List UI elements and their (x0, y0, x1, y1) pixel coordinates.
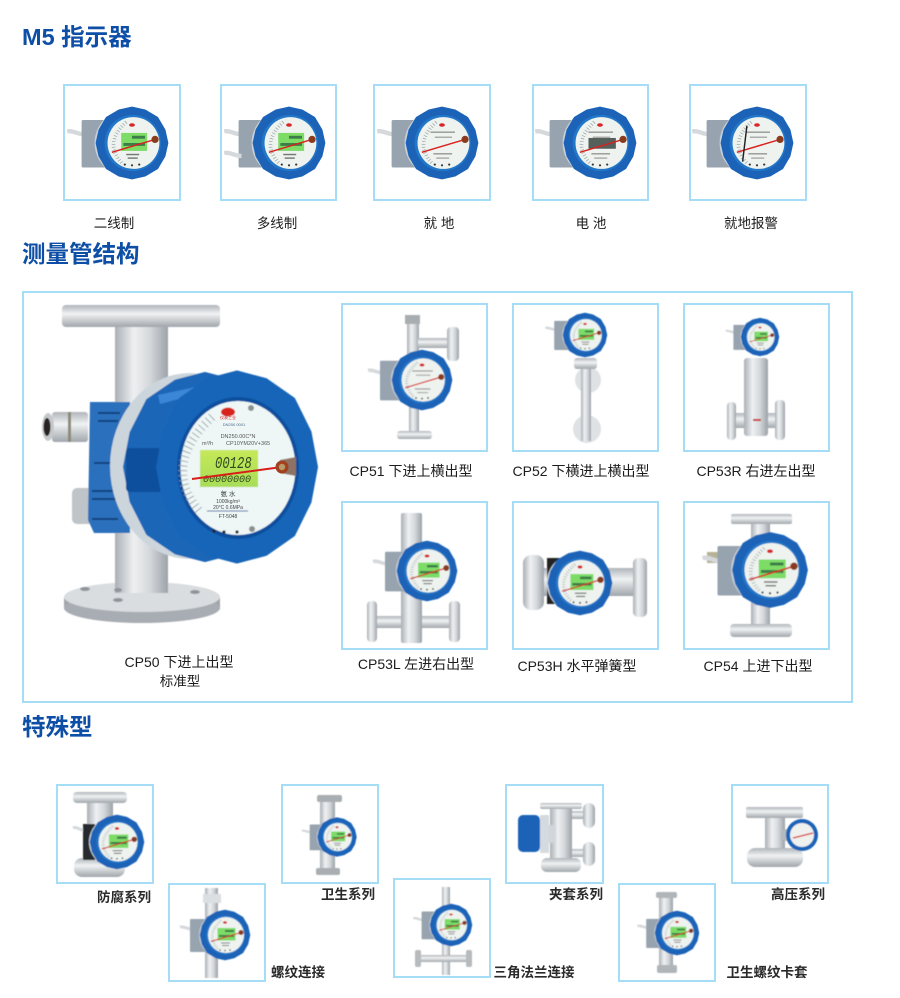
dial text: CP50: m³/h (202, 441, 213, 447)
meter: CP53L (367, 513, 460, 643)
label: high pressure: 高压系列 (771, 886, 825, 902)
tile: high-pressure series (732, 785, 828, 902)
tile: local (374, 85, 490, 231)
meter: local (377, 108, 477, 178)
label: CP50: CP50 下进上出型 (125, 654, 233, 670)
tile: sanitary series (282, 785, 378, 902)
tile: battery (533, 85, 648, 231)
meter: CP53R (726, 318, 785, 440)
tile: anticorrosion series (57, 785, 153, 905)
tile: local alarm (690, 85, 806, 231)
meter: tri-clamp (413, 887, 472, 975)
label: local alarm: 就地报警 (724, 216, 778, 231)
needle: CP50 (192, 460, 288, 479)
panel: tube structures (23, 292, 852, 702)
meter: two-wire (67, 108, 167, 178)
dial text: CP50: 00128 (215, 455, 252, 474)
meter: jacketed (518, 803, 595, 872)
meter: sanitary (302, 795, 356, 875)
label: multi-wire: 多线制 (257, 215, 297, 231)
meter: CP51 (368, 315, 459, 439)
tile: CP54 (684, 502, 829, 649)
meter: battery (535, 108, 635, 178)
meter: local alarm (692, 108, 792, 178)
heading: special types: 特殊型 (22, 714, 92, 740)
meter: sanitary threaded clamp (637, 892, 699, 973)
meter: CP50 large (42, 305, 316, 623)
dial text: CP50: DN250.00C*N (221, 434, 255, 440)
dial text: CP50: 1000kg/m³ (216, 499, 240, 505)
meter: CP53H (523, 552, 647, 617)
label: threaded: 螺纹连接 (271, 964, 325, 980)
label: tri-clamp: 三角法兰连接 (494, 964, 575, 980)
label: anticorrosion: 防腐系列 (97, 889, 151, 905)
heading: tube structure: 测量管结构 (22, 241, 140, 267)
dial text: CP50: 氨 水 (221, 489, 236, 498)
label: sanitary threaded clamp: 卫生螺纹卡套 (726, 964, 808, 980)
meter: anticorrosion (73, 792, 143, 877)
label: CP53R: CP53R 右进左出型 (696, 463, 816, 479)
meter: high pressure (746, 807, 818, 867)
dial text: CP50 (202, 414, 270, 520)
tile: CP53R (684, 304, 829, 451)
tile: tri-clamp flange (394, 879, 575, 980)
tile: threaded connection (169, 884, 325, 981)
dial text: CP50: DN250 0001 (223, 422, 246, 427)
label: standard type: 标准型 (160, 674, 200, 689)
dial text: CP50: FT-5048 (219, 514, 238, 520)
dial text: CP50: CP10YM20V+365 (226, 441, 270, 447)
dial text: CP50: 00000000 (203, 475, 251, 486)
tile: sanitary threaded clamp (619, 884, 808, 981)
label: CP53L: CP53L 左进右出型 (358, 656, 474, 672)
tile: CP52 (513, 304, 658, 451)
label: local: 就 地 (424, 216, 455, 231)
tile: multi-wire (221, 85, 336, 231)
label: sanitary: 卫生系列 (321, 886, 375, 902)
label: two-wire: 二线制 (94, 216, 134, 231)
meter: multi-wire (224, 108, 324, 178)
meter: CP54 (702, 514, 807, 637)
label: battery: 电 池 (576, 216, 606, 231)
tile: two-wire (64, 85, 180, 231)
dial text: CP50: 20°C 0.6MPa (213, 505, 243, 511)
label: jacketed: 夹套系列 (549, 886, 603, 902)
label: CP52: CP52 下横进上横出型 (513, 463, 649, 479)
tile: CP53H (513, 502, 658, 649)
heading: M5 indicator: M5 指示器 (22, 24, 132, 50)
label: CP53H: CP53H 水平弹簧型 (517, 658, 637, 674)
meter: CP52 (545, 313, 607, 443)
tile: jacketed series (506, 785, 603, 902)
tile: CP51 (342, 304, 487, 451)
label: CP54: CP54 上进下出型 (704, 658, 812, 674)
label: CP51: CP51 下进上横出型 (350, 463, 472, 479)
meter: threaded (180, 888, 250, 978)
tile: CP53L (342, 502, 487, 649)
dial text: CP50: 仪表工业 (220, 414, 236, 420)
